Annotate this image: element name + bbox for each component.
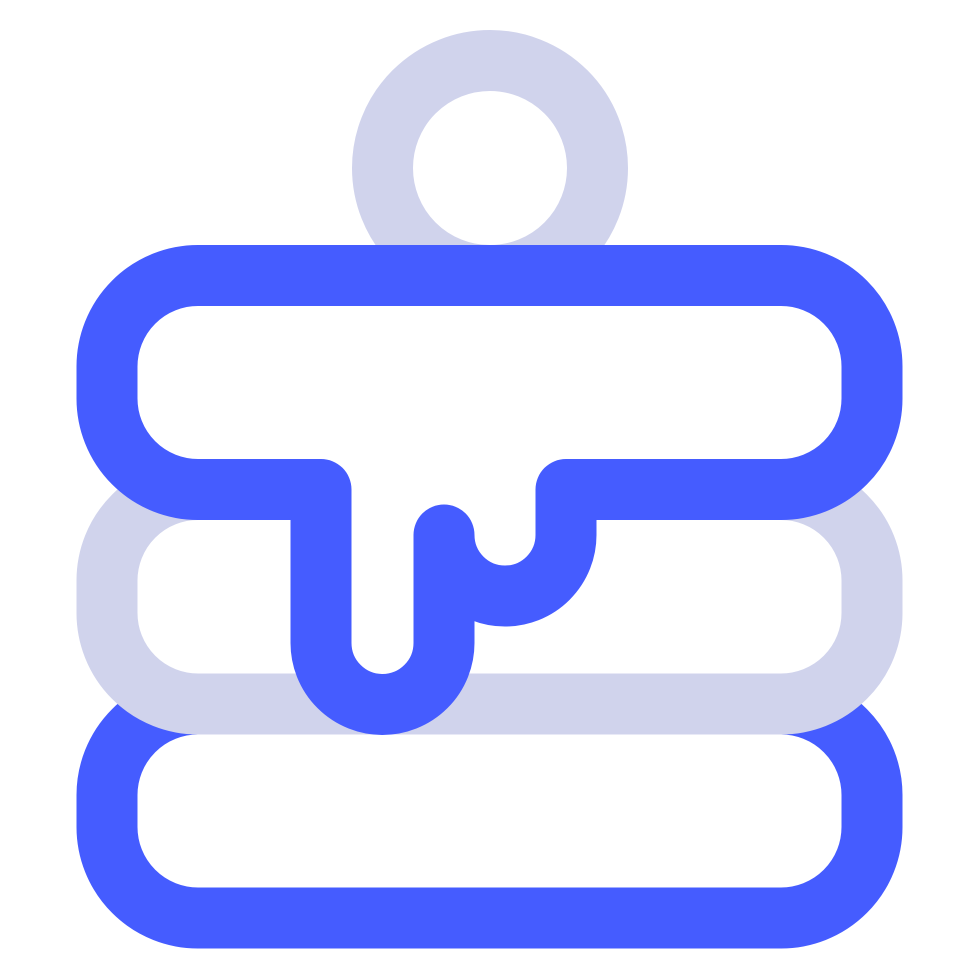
bottom pancake [107,704,872,918]
top circle: butter [382,60,598,276]
top pancake with syrup drip [107,276,872,704]
middle pancake [107,490,872,704]
